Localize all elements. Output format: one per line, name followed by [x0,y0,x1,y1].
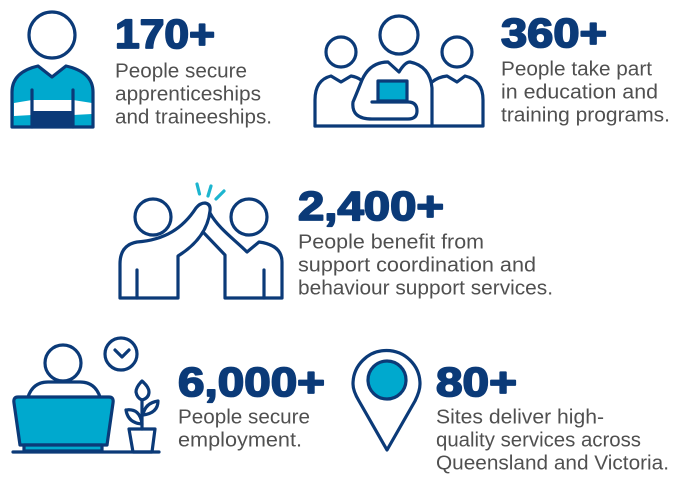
text: support description: behaviour support services. [298,278,553,300]
text: education description: in education and [501,82,658,104]
panel: support coordination [120,183,553,300]
icon: worker in high-vis shirt [12,12,93,127]
stat: 6,000+: 6,000+ [178,359,325,405]
text: support description: support coordination and [298,255,536,277]
text: sites description: quality services across [436,430,641,452]
text: support description: People benefit from [298,232,484,254]
panel: sites [353,350,669,475]
stat: 170+: 170+ [115,11,215,57]
text: education description: training programs. [501,105,670,127]
text: sites description: Queensland and Victoria. [436,453,669,475]
text: employment description [178,407,310,452]
text: sites description: Sites deliver high- [436,407,604,429]
stat: 360+: 360+ [501,10,607,56]
panel: apprenticeships [12,11,272,129]
icon: location pin [353,350,420,450]
text: support description [298,232,553,300]
text: apprenticeships description [115,61,272,129]
stat: 80+: 80+ [436,359,517,405]
panel: employment [13,338,325,452]
icon: person at laptop with clock and plant [13,338,159,452]
icon: three people with laptop [315,16,483,126]
text: education description [501,59,670,127]
text: education description: People take part [501,59,652,81]
text: employment description: People secure [178,407,310,429]
panel: education and training [315,10,670,127]
stat: 2,400+: 2,400+ [298,183,444,229]
text: apprenticeships description: People secure [115,61,247,83]
icon: two people high-five [120,184,282,298]
text: apprenticeships description: and traineeships. [115,107,272,129]
text: apprenticeships description: apprenticeships [115,84,261,106]
text: sites description [436,407,669,475]
text: employment description: employment. [178,430,302,452]
